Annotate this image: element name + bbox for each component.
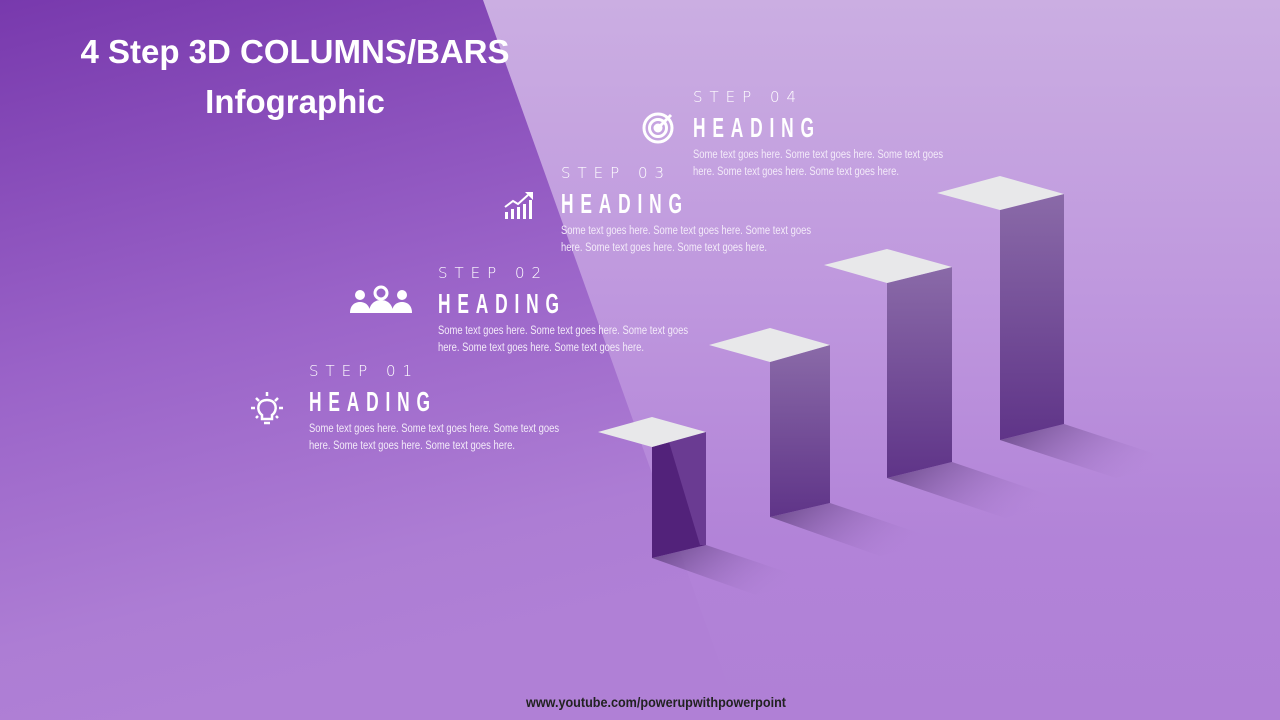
column 3	[824, 249, 1070, 518]
step 02: STEP 02	[438, 264, 548, 282]
title: Infographic	[205, 83, 385, 120]
icon: growth chart	[504, 192, 533, 219]
icon: target	[642, 112, 674, 144]
icon: people	[350, 286, 412, 313]
step 04: HEADING	[693, 112, 821, 143]
step 03: HEADING	[561, 188, 689, 219]
column 4	[937, 176, 1180, 478]
title: 4 Step 3D COLUMNS/BARS	[80, 33, 510, 70]
step 03: Some text goes here. Some text goes here. Some text goes here. Some text goes here. Some text goes here.	[561, 225, 811, 254]
step 02	[350, 264, 688, 354]
step 01	[251, 362, 559, 452]
footer url: www.youtube.com/powerupwithpowerpoint	[526, 694, 786, 710]
column 1	[598, 417, 810, 595]
step 04	[642, 88, 943, 178]
step 02: HEADING	[438, 288, 566, 319]
step 02: Some text goes here. Some text goes here. Some text goes here. Some text goes here. Some text goes here.	[438, 325, 688, 354]
step 01: Some text goes here. Some text goes here. Some text goes here. Some text goes here. Some text goes here.	[309, 423, 559, 452]
title	[80, 33, 510, 120]
step 04: Some text goes here. Some text goes here. Some text goes here. Some text goes here. Some text goes here.	[693, 149, 943, 178]
step 03	[504, 164, 811, 254]
step 04: STEP 04	[693, 88, 803, 106]
column 2	[709, 328, 940, 556]
step 01: STEP 01	[309, 362, 419, 380]
step 03: STEP 03	[561, 164, 671, 182]
step 01: HEADING	[309, 386, 437, 417]
icon: light bulb	[251, 392, 283, 424]
